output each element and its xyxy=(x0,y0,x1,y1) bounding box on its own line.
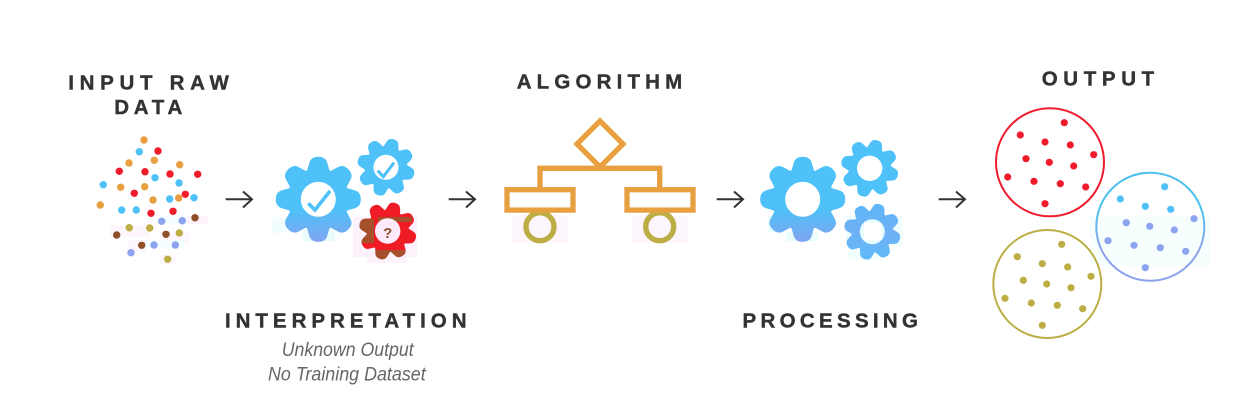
arrow: input to interpretation xyxy=(226,192,252,208)
heading: algorithm: ALGORITHM xyxy=(517,71,682,94)
text: unknown output, no training dataset: No Training Dataset xyxy=(268,365,426,386)
olive leaf nodes xyxy=(526,213,674,241)
scatter: unsorted raw data points xyxy=(97,136,208,264)
heading: processing: PROCESSING xyxy=(742,309,918,332)
orange branches and decision boxes xyxy=(507,121,693,210)
icon: processing gears xyxy=(760,140,902,260)
cluster: olive xyxy=(993,230,1101,338)
icon: red gear with question mark xyxy=(359,202,416,260)
arrow: algorithm to processing xyxy=(717,192,743,208)
icon: small upper gear xyxy=(834,133,905,204)
diagram: decision tree xyxy=(507,121,693,243)
heading: interpretation: INTERPRETATION xyxy=(225,310,466,333)
icon: small lower gear xyxy=(844,204,900,260)
icon: red gear with question mark: ? xyxy=(383,225,392,242)
infographic: machine learning flow xyxy=(69,71,1206,384)
icon: large blue gear with check xyxy=(276,156,361,242)
icon: small blue gear with check xyxy=(350,132,422,203)
arrow: processing to output xyxy=(939,192,965,208)
heading: input raw data xyxy=(68,71,229,119)
icon: large blue gear xyxy=(760,156,846,242)
heading: input raw data: DATA xyxy=(114,96,182,119)
icon: interpretation gears xyxy=(272,139,417,263)
heading: input raw data: INPUT RAW xyxy=(68,71,229,94)
text: unknown output, no training dataset: Unknown Output xyxy=(282,340,414,361)
arrow: interpretation to algorithm xyxy=(449,192,475,208)
cluster: blue xyxy=(1090,173,1210,281)
heading: output: OUTPUT xyxy=(1042,68,1155,91)
cluster: red xyxy=(996,108,1104,216)
text: unknown output, no training dataset xyxy=(268,340,426,386)
